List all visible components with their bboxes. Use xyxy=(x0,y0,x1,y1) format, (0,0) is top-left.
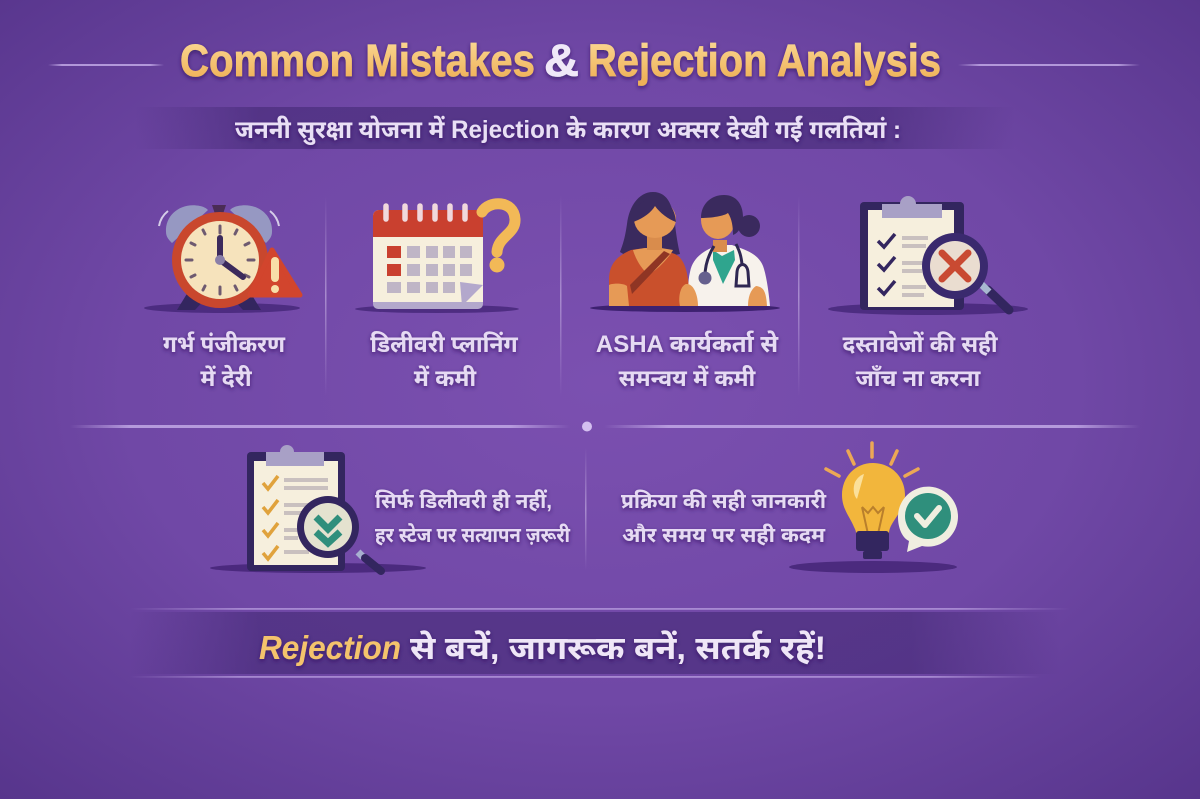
icon: light bulb with check badge xyxy=(789,443,958,573)
icon: clipboard with red cross magnifier xyxy=(828,196,1028,315)
column dividers xyxy=(325,196,800,396)
text: verification note xyxy=(375,489,571,547)
text: verification note: सिर्फ डिलीवरी ही नहीं, xyxy=(375,489,552,513)
icon: calendar with question mark xyxy=(355,204,519,313)
label: late registration xyxy=(163,331,285,391)
label: delivery planning: में कमी xyxy=(414,365,477,391)
label: late registration: में देरी xyxy=(200,365,253,391)
subtitle band: जननी सुरक्षा योजना में Rejection के कारण अक्सर देखी गईं गलतियां : xyxy=(235,115,901,145)
label: ASHA coordination: ASHA कार्यकर्ता से xyxy=(596,330,779,358)
label: ASHA coordination xyxy=(596,330,779,391)
title: & xyxy=(544,35,579,86)
icon: clipboard with green check magnifier xyxy=(210,445,426,573)
horizontal divider with dot xyxy=(70,422,1140,432)
vertical divider lower xyxy=(585,448,586,570)
title: Rejection Analysis xyxy=(588,35,941,86)
text: correct information xyxy=(621,489,827,547)
title xyxy=(48,35,1140,86)
label: ASHA coordination: समन्वय में कमी xyxy=(619,365,757,391)
title: Common Mistakes xyxy=(180,35,535,86)
bottom banner xyxy=(130,608,1070,678)
text: correct information: और समय पर सही कदम xyxy=(622,523,825,547)
label: document check: दस्तावेजों की सही xyxy=(842,331,999,357)
text: correct information: प्रक्रिया की सही जानकारी xyxy=(621,489,827,513)
icon: ASHA worker and doctor xyxy=(590,192,780,312)
bottom banner: से बचें, जागरूक बनें, सतर्क रहें! xyxy=(410,630,826,666)
label: late registration: गर्भ पंजीकरण xyxy=(163,331,285,357)
subtitle band xyxy=(135,107,1015,149)
label: delivery planning xyxy=(370,331,519,391)
bottom banner: Rejection xyxy=(259,629,401,666)
label: delivery planning: डिलीवरी प्लानिंग xyxy=(370,331,519,357)
label: document check xyxy=(842,331,999,391)
icon: alarm clock with warning xyxy=(144,205,300,313)
text: verification note: हर स्टेज पर सत्यापन ज़रूरी xyxy=(375,523,571,547)
label: document check: जाँच ना करना xyxy=(856,365,982,391)
